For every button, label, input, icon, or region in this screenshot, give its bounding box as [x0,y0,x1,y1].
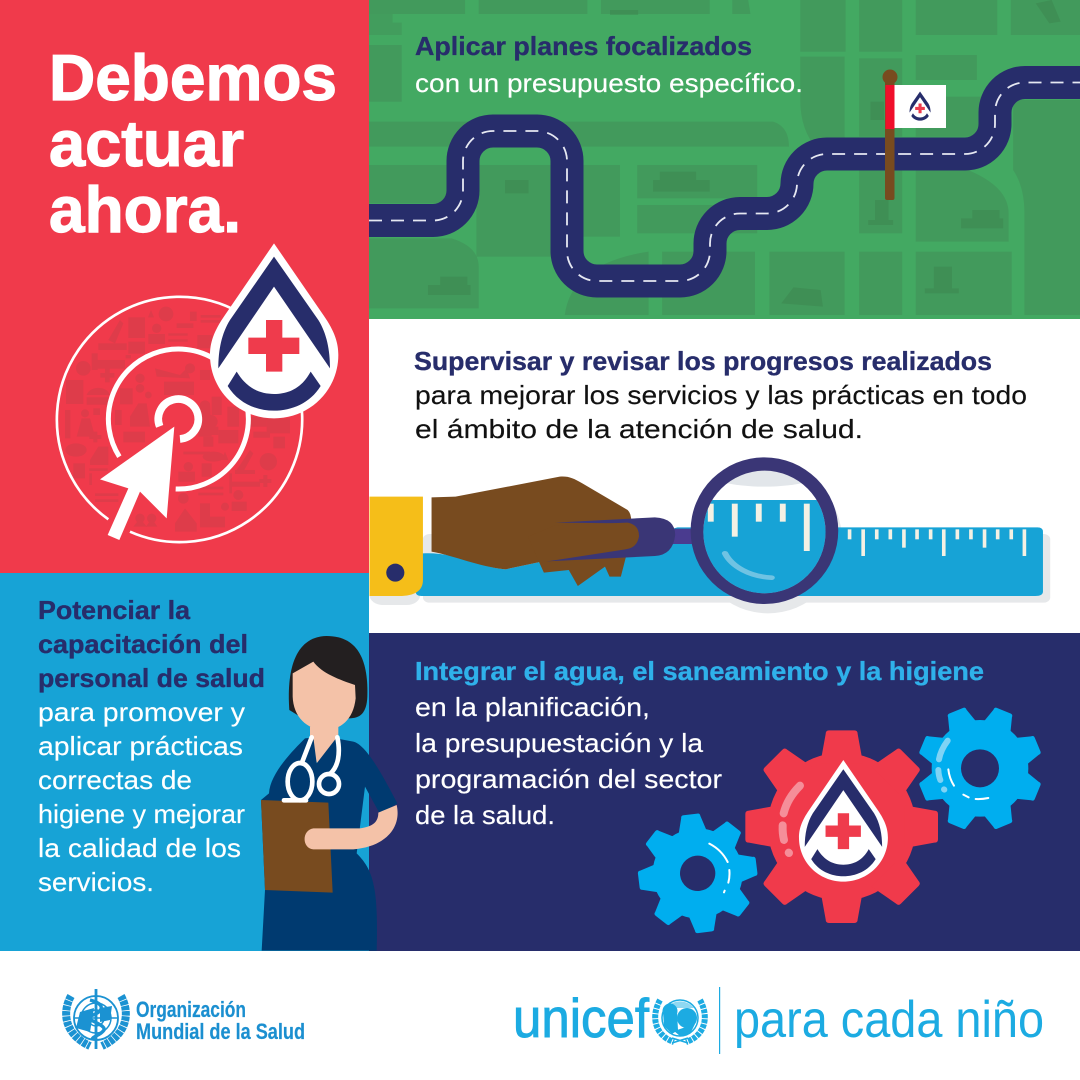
heading: Debemos actuar ahora [49,41,337,246]
ruler ticks [848,529,1026,556]
text: Organizacion Mundial de la Salud [136,997,305,1044]
finger over handle [528,523,639,563]
text: Aplicar planes focalizados: con un presupuesto específico. [415,68,803,98]
text: Aplicar planes focalizados: Aplicar planes focalizados [415,31,752,61]
magnifier lens glass [703,484,826,594]
target background icons [65,307,290,532]
heading: Debemos actuar ahora: ahora. [49,173,241,246]
drop logo on gear [799,760,888,882]
text: Organizacion Mundial de la Salud: Mundial de la Salud [136,1019,305,1044]
magnifier handle [542,517,675,562]
sleeve [370,497,423,596]
magnifier ring [691,457,838,604]
text: Integrar el agua: la presupuestación y la [415,728,704,758]
stethoscope [284,737,339,800]
text: Supervisar y revisar: para mejorar los servicios y las prácticas en todo [415,380,1027,410]
road [369,82,1080,281]
map houses [428,0,1061,307]
clipboard [261,800,333,893]
ruler [416,527,1043,596]
centre ring [158,399,198,439]
text: Supervisar y revisar: el ámbito de la atención de salud. [415,414,863,444]
road centre dashes [369,82,1080,281]
text: Potenciar la capacitacion: personal de salud [38,663,265,693]
text: Organizacion Mundial de la Salud: Organización [136,997,246,1022]
outer ring [57,297,302,542]
text: Potenciar la capacitacion: la calidad de los [38,833,241,863]
illustration: hand with magnifier over ruler [370,453,1050,613]
text: Integrar el agua: programación del sector [415,764,722,794]
text: Supervisar y revisar: Supervisar y revisar los progresos realizados [414,346,992,376]
text: Supervisar y revisar [414,346,1027,444]
text: Potenciar la capacitacion: Potenciar la [38,595,191,625]
gear left highlights [709,844,730,892]
divider [719,987,720,1054]
heading: Debemos actuar ahora: Debemos [49,41,337,114]
gear: blue left [632,807,764,939]
text: Potenciar la capacitacion: para promover y [38,697,245,727]
illustration: gears [632,687,1061,939]
uniform [261,737,397,951]
arm [305,805,398,849]
gear: blue right [899,687,1061,850]
text: Potenciar la capacitacion: capacitación del [38,629,248,659]
magnifier shaft [673,529,696,544]
gear: red centre [745,730,938,923]
text: Potenciar la capacitacion: correctas de [38,765,192,795]
neck [310,727,338,767]
gear red highlights [783,786,800,853]
panel: navy water section [369,633,1080,951]
panel: green map with road [369,0,1080,319]
face [293,662,356,730]
icon: target with cursor and health drop [57,243,338,542]
heading: Debemos actuar ahora: actuar [49,107,244,180]
panel: blue training section [0,573,369,951]
back hair [289,636,367,718]
text: Potenciar la capacitacion: aplicar prácticas [38,731,243,761]
logo: WHO emblem [66,989,126,1049]
illustration: health worker [261,636,398,951]
text: Integrar el agua: de la salud. [415,800,555,830]
panel: red title background [0,0,369,573]
text: Potenciar la capacitacion: higiene y mejorar [38,799,245,829]
hand [432,477,637,569]
shadows [370,465,1050,613]
middle ring [108,349,248,489]
panel: white monitoring section [369,319,1080,633]
panel: footer [0,951,1080,1080]
cursor arrow [100,427,174,540]
logo: unicef emblem [655,1000,705,1043]
gear right highlights [938,741,988,799]
hand lower fingers [539,547,629,586]
text: Aplicar planes focalizados [415,31,803,98]
map blocks [369,0,1080,315]
text: Potenciar la capacitacion: servicios. [38,867,154,897]
sleeve button [386,564,404,582]
text: para cada nino: para cada niño [734,991,1044,1049]
text: Integrar el agua: en la planificación, [415,692,650,722]
drop logo [210,243,338,418]
icon: flag [882,70,946,200]
text: Integrar el agua: Integrar el agua, el saneamiento y la higiene [415,656,984,686]
text: Integrar el agua [415,656,984,830]
text: Potenciar la capacitacion [38,595,265,897]
logo: unicef wordmark: unicef [513,987,650,1049]
